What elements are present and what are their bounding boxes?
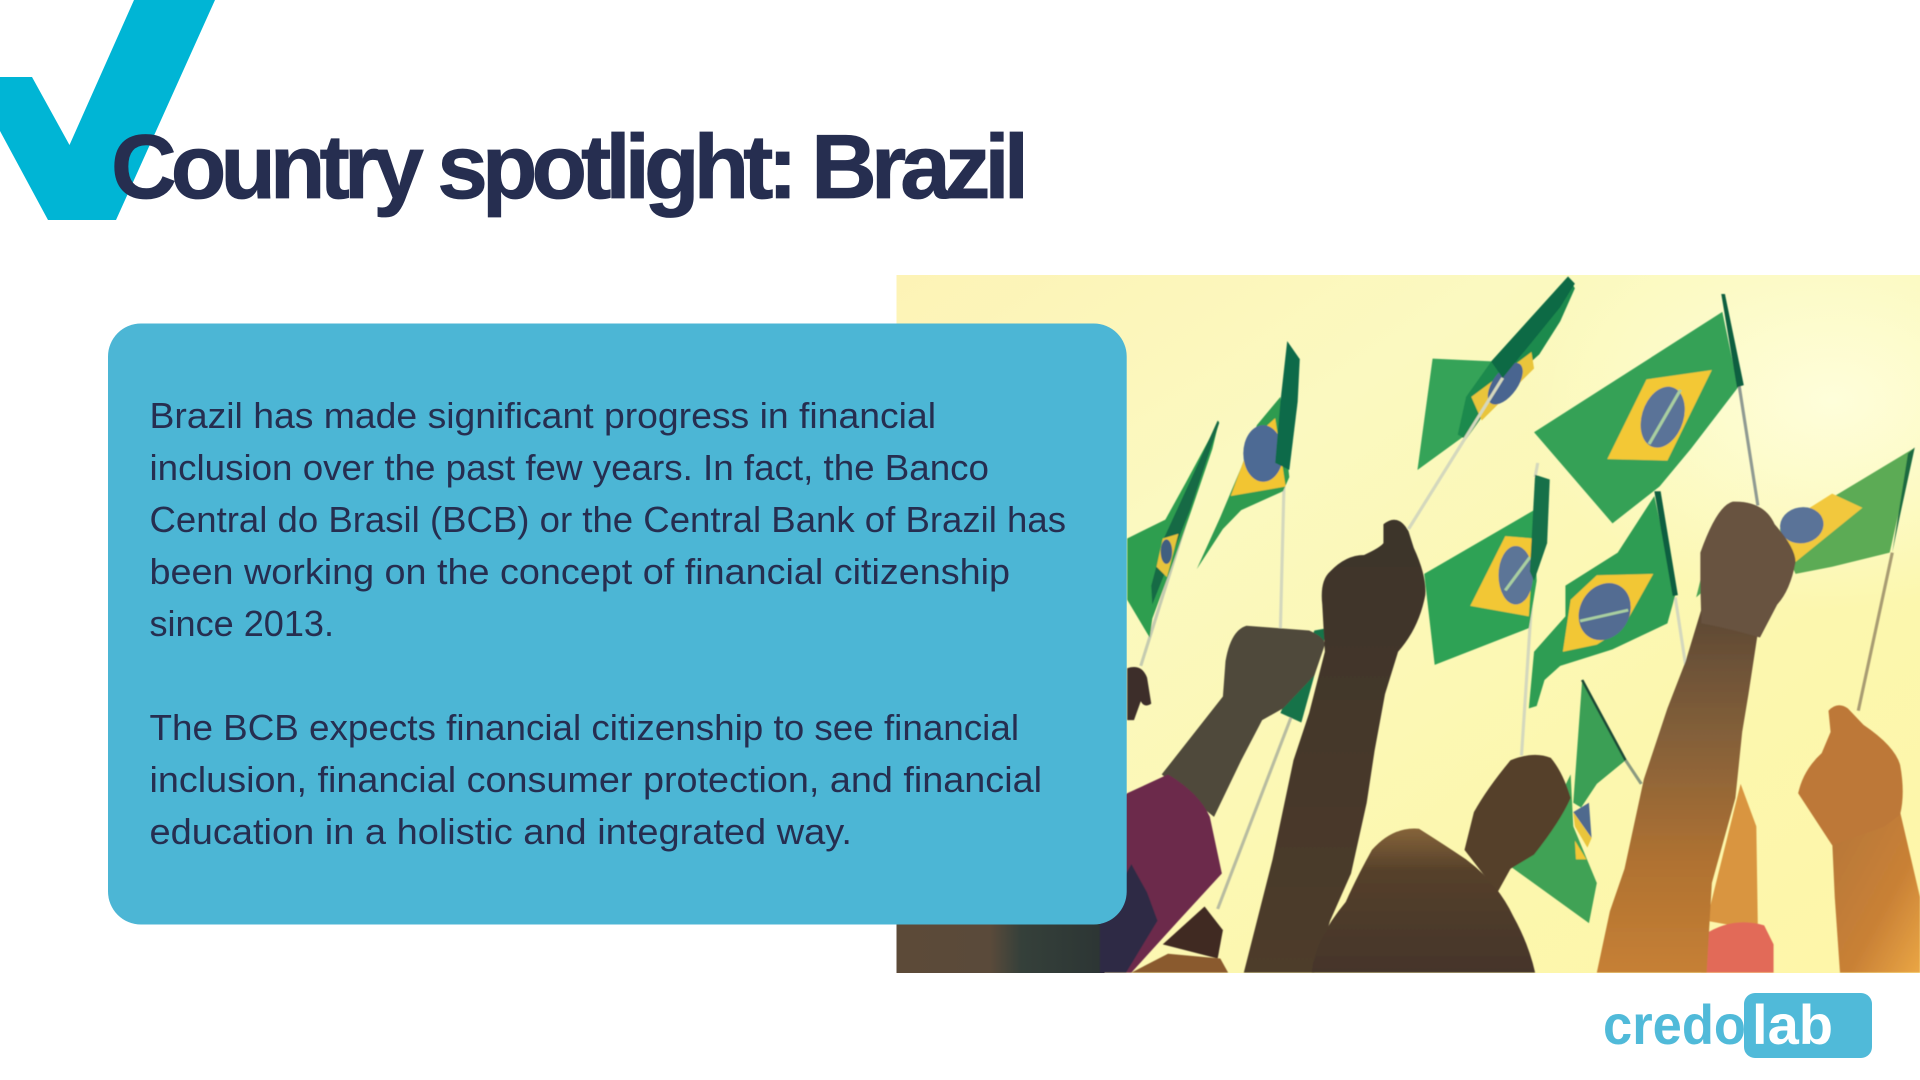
fist: lower centre (1465, 755, 1571, 892)
text block: first paragraph: since 2013. (150, 603, 334, 644)
text block: second paragraph: education in a holistic and integrated way. (150, 811, 852, 852)
flag: upper left (1197, 341, 1300, 569)
title: Country spotlight: Brazil (111, 117, 1029, 218)
flag: lower centre (1511, 680, 1626, 923)
logo: credolab: credo (1603, 993, 1746, 1056)
hand and hair: lower left (1131, 907, 1228, 973)
arm: far right (1798, 705, 1920, 973)
arm: large right (1597, 502, 1796, 973)
fist: small left (1127, 667, 1151, 720)
text block: first paragraph: inclusion over the past few years. In fact, the Banco (150, 447, 989, 488)
panel: description (108, 324, 1127, 924)
icon: cyan checkmark (0, 0, 215, 220)
logo: credolab: lab (1752, 993, 1833, 1056)
text block: first paragraph: Central do Brasil (BCB) or the Central Bank of Brazil has (150, 499, 1066, 540)
flag: right (1696, 447, 1915, 597)
logo: credolab (1603, 993, 1872, 1058)
flag: upper right large (1534, 294, 1744, 523)
flag: behind fist (1280, 628, 1327, 723)
text block: second paragraph: The BCB expects financial citizenship to see financial (150, 707, 1019, 748)
text block: first paragraph (150, 395, 1066, 644)
arm: tall centre (1244, 520, 1425, 973)
arm: left with red sleeve (1100, 626, 1325, 973)
text block: second paragraph (150, 707, 1042, 852)
text block: first paragraph: been working on the concept of financial citizenship (150, 551, 1010, 592)
head with hair (1312, 828, 1535, 973)
photo: raised hands waving Brazilian flags (896, 275, 1920, 973)
flag: top centre (1416, 276, 1576, 470)
flag: centre (1424, 475, 1550, 665)
flag: centre right (1529, 491, 1678, 708)
text block: first paragraph: Brazil has made significant progress in financial (150, 395, 936, 436)
text block: second paragraph: inclusion, financial consumer protection, and financial (150, 759, 1042, 800)
flag: far left (1127, 420, 1219, 638)
